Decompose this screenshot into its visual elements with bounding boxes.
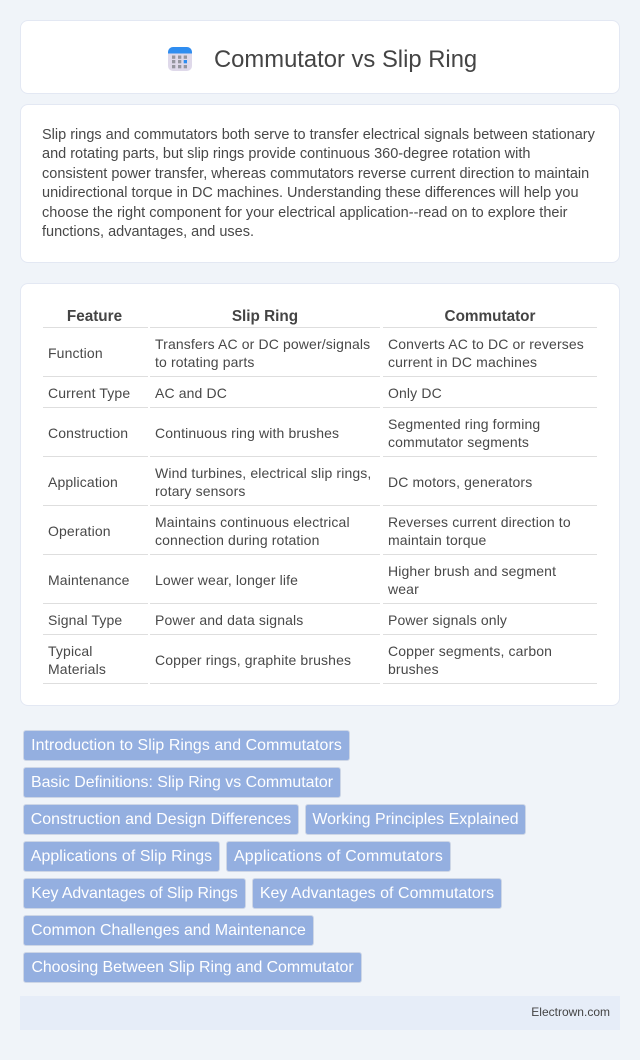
topic tags: Key Advantages of Slip Rings <box>31 885 238 902</box>
table content: Continuous ring with brushes <box>155 425 339 441</box>
icon: calendar <box>168 47 192 71</box>
table content: Only DC <box>388 385 442 401</box>
topic tags: Basic Definitions: Slip Ring vs Commutator <box>31 774 333 791</box>
comparison table card <box>20 283 620 706</box>
table content: Operation <box>48 523 111 539</box>
table content: Application <box>48 474 118 490</box>
summary text: Slip rings and commutators both serve to transfer electrical signals between stationary <box>42 127 595 143</box>
summary text: functions, advantages, and uses. <box>42 224 254 240</box>
table content: Current Type <box>48 385 130 401</box>
table content: Construction <box>48 425 128 441</box>
topic tags <box>23 730 526 983</box>
topic tags: Working Principles Explained <box>312 811 519 828</box>
table content: Segmented ring forming <box>388 416 540 432</box>
header card <box>20 20 620 94</box>
topic tags: Applications of Slip Rings <box>31 848 212 865</box>
table content: Power signals only <box>388 612 507 628</box>
table content: Power and data signals <box>155 612 303 628</box>
table content: wear <box>388 581 419 597</box>
topic tags: Construction and Design Differences <box>31 811 291 828</box>
topic tags: Introduction to Slip Rings and Commutators <box>31 737 342 754</box>
table content: Slip Ring <box>232 308 298 325</box>
summary text: consistent power transfer, whereas commutators reverse current direction to maintain <box>42 166 589 182</box>
table content: to rotating parts <box>155 354 254 370</box>
topic tags: Choosing Between Slip Ring and Commutator <box>31 959 354 976</box>
table content: commutator segments <box>388 434 529 450</box>
footer: Electrown.com <box>531 1005 610 1019</box>
summary card <box>20 104 620 263</box>
table content: Converts AC to DC or reverses <box>388 336 584 352</box>
table content: AC and DC <box>155 385 227 401</box>
table content: Maintenance <box>48 572 130 588</box>
table content: Maintains continuous electrical <box>155 514 350 530</box>
table content: Wind turbines, electrical slip rings, <box>155 465 371 481</box>
table content: DC motors, generators <box>388 474 532 490</box>
table content: connection during rotation <box>155 532 320 548</box>
topic tags: Common Challenges and Maintenance <box>31 922 306 939</box>
table content: current in DC machines <box>388 354 537 370</box>
table content: maintain torque <box>388 532 486 548</box>
summary text: choose the right component for your electrical application--read on to explore their <box>42 205 568 221</box>
table content: Signal Type <box>48 612 122 628</box>
table content: Commutator <box>445 308 535 325</box>
table content: Higher brush and segment <box>388 563 556 579</box>
summary text <box>42 127 595 240</box>
table content: Transfers AC or DC power/signals <box>155 336 370 352</box>
title: Commutator vs Slip Ring <box>214 46 477 73</box>
summary text: unidirectional torque in DC machines. Understanding these differences will help you <box>42 185 579 201</box>
topic tags: Applications of Commutators <box>234 848 443 865</box>
summary text: and rotating parts, but slip rings provide continuous 360-degree rotation with <box>42 146 530 162</box>
table content: Materials <box>48 661 106 677</box>
table content: brushes <box>388 661 439 677</box>
table content: Reverses current direction to <box>388 514 571 530</box>
table content: Typical <box>48 643 92 659</box>
table content: Copper rings, graphite brushes <box>155 652 351 668</box>
table content: rotary sensors <box>155 483 246 499</box>
table content: Function <box>48 345 103 361</box>
topic tags: Key Advantages of Commutators <box>260 885 494 902</box>
footer <box>20 996 620 1030</box>
table content: Copper segments, carbon <box>388 643 552 659</box>
table content: Feature <box>67 308 122 325</box>
table content: Lower wear, longer life <box>155 572 298 588</box>
